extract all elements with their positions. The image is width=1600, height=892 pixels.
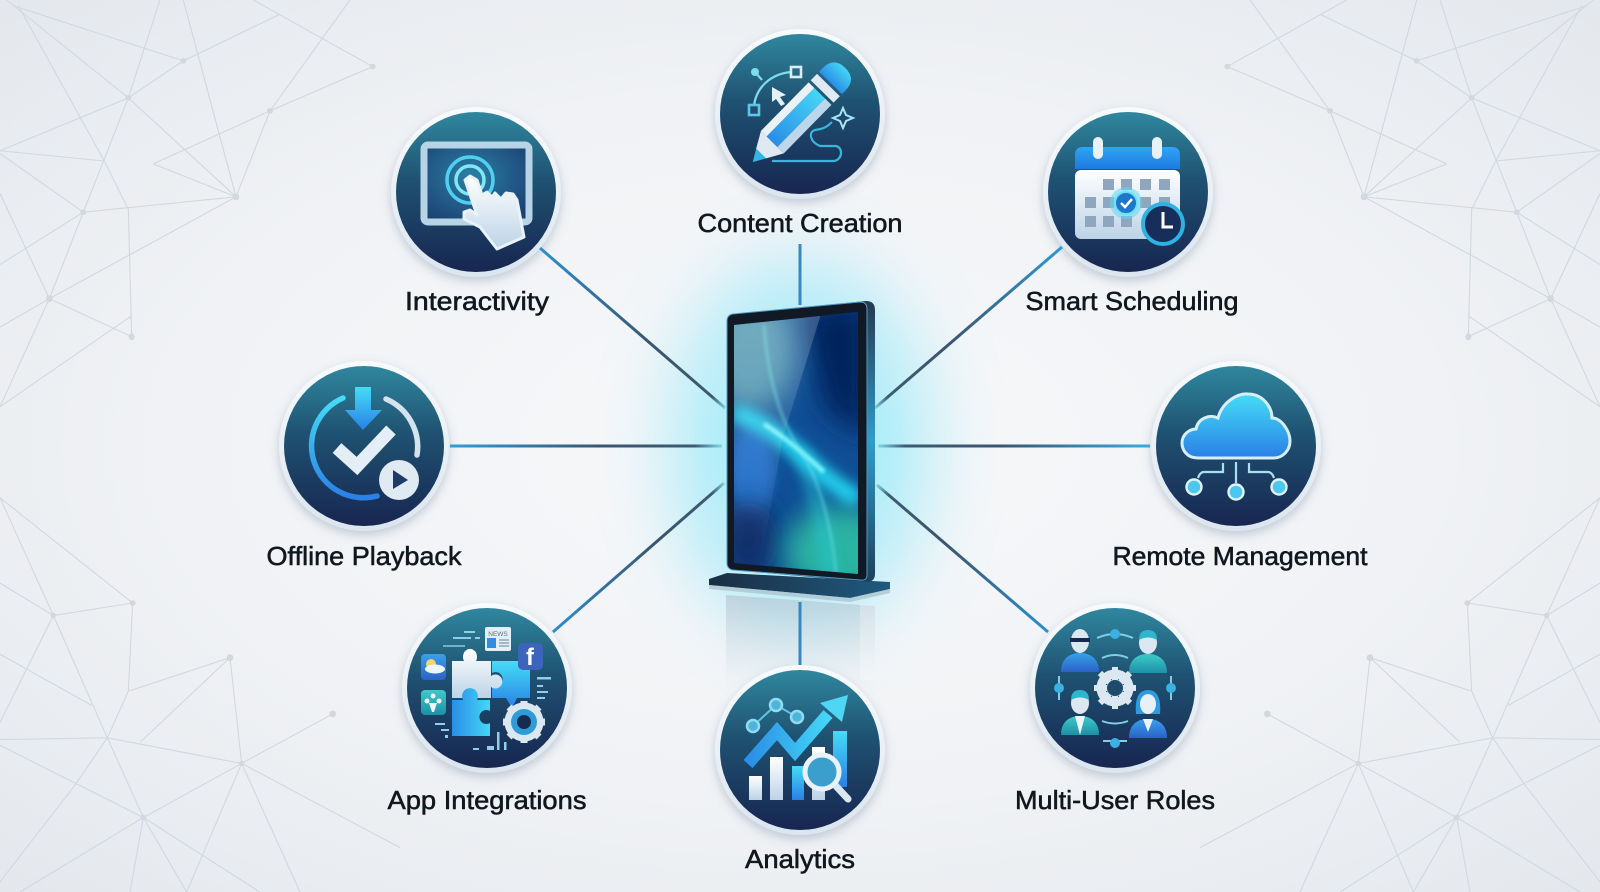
icon: growth chart with magnifier [715, 665, 885, 835]
icon: calendar with clock [1043, 107, 1213, 277]
icon: puzzle with app tiles: NEWS [488, 631, 508, 638]
node: Offline Playback [266, 361, 463, 571]
icon: cloud network [1151, 361, 1321, 531]
icon: download check and play [279, 361, 449, 531]
monitor reflection [726, 595, 875, 690]
node: Remote Management [1112, 361, 1368, 571]
icon: touch screen with hand [391, 107, 561, 277]
icon: puzzle with app tiles [402, 603, 572, 773]
display base [709, 573, 890, 602]
label: Multi-User Roles: Multi-User Roles [1015, 785, 1215, 815]
connector lines [450, 244, 1150, 668]
label: Remote Management: Remote Management [1112, 541, 1368, 571]
icon: four users around a gear [1030, 603, 1200, 773]
node: Interactivity [391, 107, 561, 316]
label: Analytics: Analytics [745, 844, 855, 874]
digital signage display [706, 294, 900, 602]
icon: pencil and vector path [715, 29, 885, 199]
display body [727, 301, 875, 582]
label: App Integrations: App Integrations [388, 785, 586, 815]
node: Multi-User Roles [1015, 603, 1215, 815]
display screen [734, 312, 858, 574]
node: App Integrations [388, 603, 586, 815]
label: Smart Scheduling: Smart Scheduling [1026, 286, 1238, 316]
label: Offline Playback: Offline Playback [266, 541, 463, 571]
icon: puzzle with app tiles: f [526, 644, 535, 671]
label: Interactivity: Interactivity [405, 286, 549, 316]
central glow [665, 256, 935, 636]
node: Content Creation [698, 29, 902, 238]
node: Smart Scheduling [1026, 107, 1238, 316]
label: Content Creation: Content Creation [698, 208, 902, 238]
node: Analytics [715, 665, 885, 874]
